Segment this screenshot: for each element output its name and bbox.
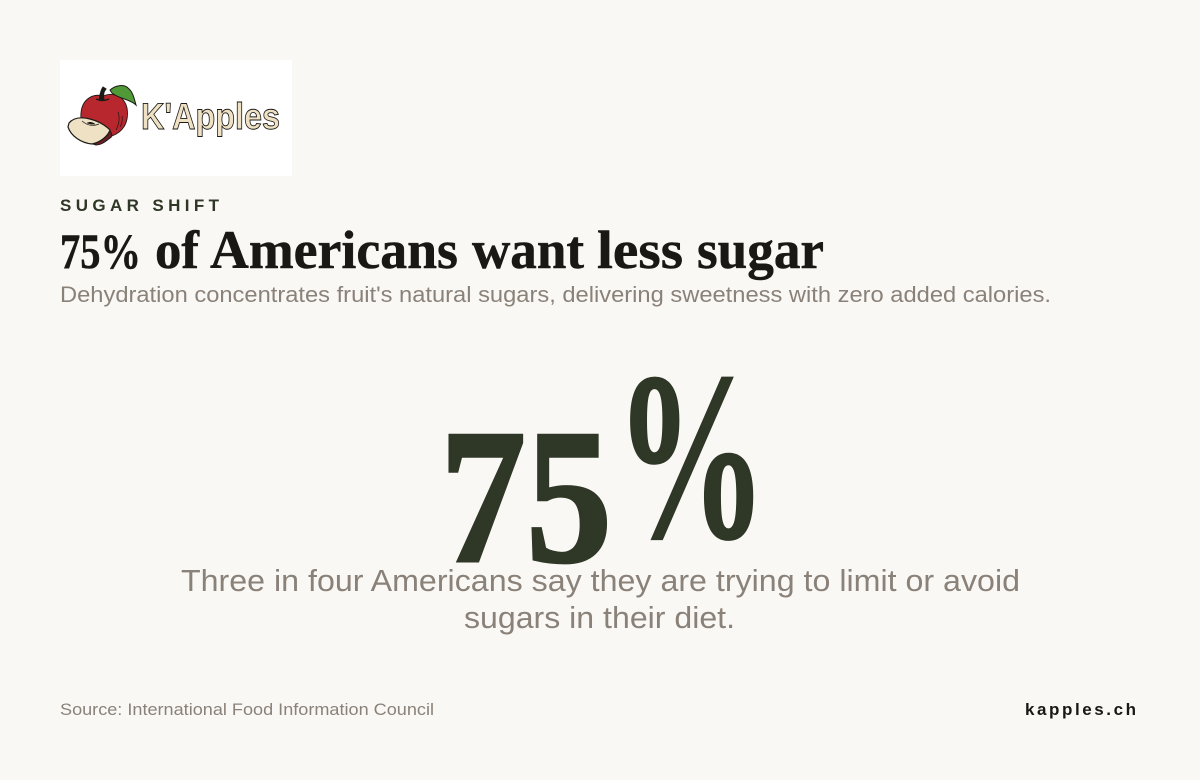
title: 75% — [60, 223, 141, 279]
stat description: sugars in their diet. — [464, 601, 735, 635]
title: want — [472, 220, 584, 280]
title — [60, 220, 824, 280]
source: Source: International Food Information Council — [60, 700, 434, 719]
title: sugar — [697, 220, 824, 280]
stat description — [181, 564, 1020, 635]
logo — [60, 60, 292, 176]
eyebrow: SUGAR SHIFT — [60, 196, 220, 215]
subtitle: Dehydration concentrates fruit's natural sugars, delivering sweetness with zero added calories. — [60, 282, 1051, 307]
site url: kapples.ch — [1025, 700, 1136, 719]
title: Americans — [210, 220, 458, 280]
big stat: % — [615, 323, 767, 589]
title: less — [597, 220, 683, 280]
logo wordmark: K'Apples — [141, 96, 280, 137]
icon: apple — [68, 86, 136, 145]
big stat: 75 — [440, 390, 612, 603]
stat description: Three in four Americans say they are trying to limit or avoid — [181, 564, 1020, 598]
big stat — [440, 323, 767, 603]
title: of — [155, 220, 200, 280]
